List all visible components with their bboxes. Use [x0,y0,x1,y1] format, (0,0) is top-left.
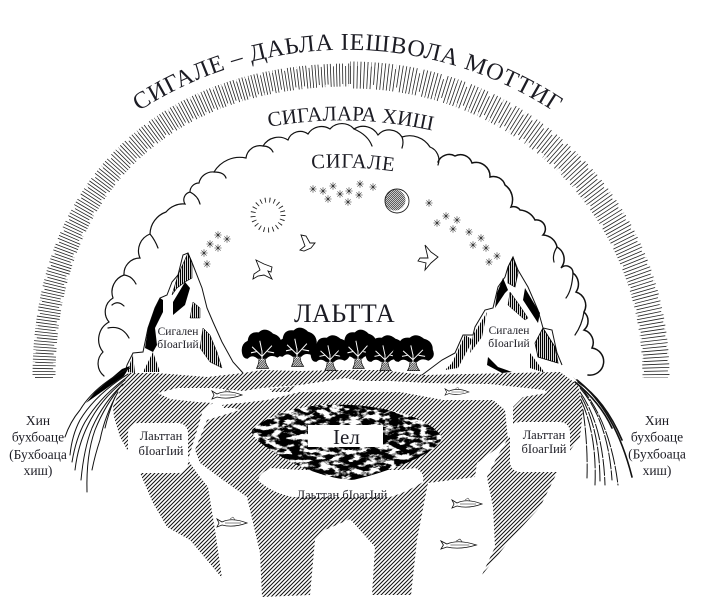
lake label box [308,425,383,447]
label: mountain waters right: Сигален [489,325,529,337]
label: seven seas left: хиш) [24,463,52,478]
heading: earth: ЛАЬТТА [294,299,395,328]
ray tips: irregular inner edge [56,87,641,378]
label: seven seas left: (Бухбоаца [9,447,67,462]
land: left column and upper bank [113,370,428,578]
land: right column and bank [420,368,583,575]
fish: lower left [217,517,247,527]
trees [242,328,434,371]
lake label: Iел [333,425,360,449]
title: outer arc heading: СИГАЛЕ – ДАЬЛА IЕШВОЛА МОТТИГ [134,34,564,110]
underground water: left label area [128,423,188,473]
waterfall: right [575,380,632,485]
label: ground waters centre: Лаьттан бIоагIий [297,488,388,502]
sun [253,200,283,230]
fish: middle right [452,498,482,508]
fish: upper left [212,389,242,399]
cloud outline of the sky dome [98,124,604,376]
fish: upper right [445,387,469,395]
label: mountain waters left: Сигален [158,326,198,338]
bird: left [253,260,272,279]
sky rays: left half of the arc [44,75,350,378]
fish: lower right [441,539,476,549]
left mountain [125,253,243,373]
label: ground waters right: Лаьттан [523,428,566,442]
label: mountain waters left: бIоагIий [157,339,199,351]
stars: top group [309,180,377,206]
label: seven seas left: Хин [26,413,50,428]
label: seven seas right: бухбоаце [631,430,683,444]
label: mountain waters right: бIоагIий [488,338,530,350]
river islets [222,386,295,408]
underground water: right label area [510,422,570,472]
bird: right [418,245,438,270]
label: seven seas right: Хин [645,413,669,428]
right mountain [422,257,585,390]
label: seven seas right: хиш) [643,463,671,478]
label: ground waters left: Лаьттан [140,429,183,443]
waterfall: left [65,366,130,492]
moon [384,189,409,213]
bird: centre [300,235,315,251]
stars: left group [200,231,231,268]
label: seven seas left: бухбоаце [12,430,64,444]
label: seven seas right: (Бухбоаца [628,446,686,462]
ray tips: irregular outer edge [32,63,671,378]
land: central block with arch [195,392,508,597]
lake [252,404,442,480]
underground water: centre label area [258,468,423,497]
label: ground waters left: бIоагIий [138,444,184,458]
sky rays: right half of the arc [350,75,656,378]
heading: seven skies: СИГАЛАРА ХИШ [268,106,434,130]
heading: sky: СИГАЛЕ [312,154,394,172]
stars: right group [425,199,501,266]
label: ground waters right: бIоагIий [522,442,567,456]
